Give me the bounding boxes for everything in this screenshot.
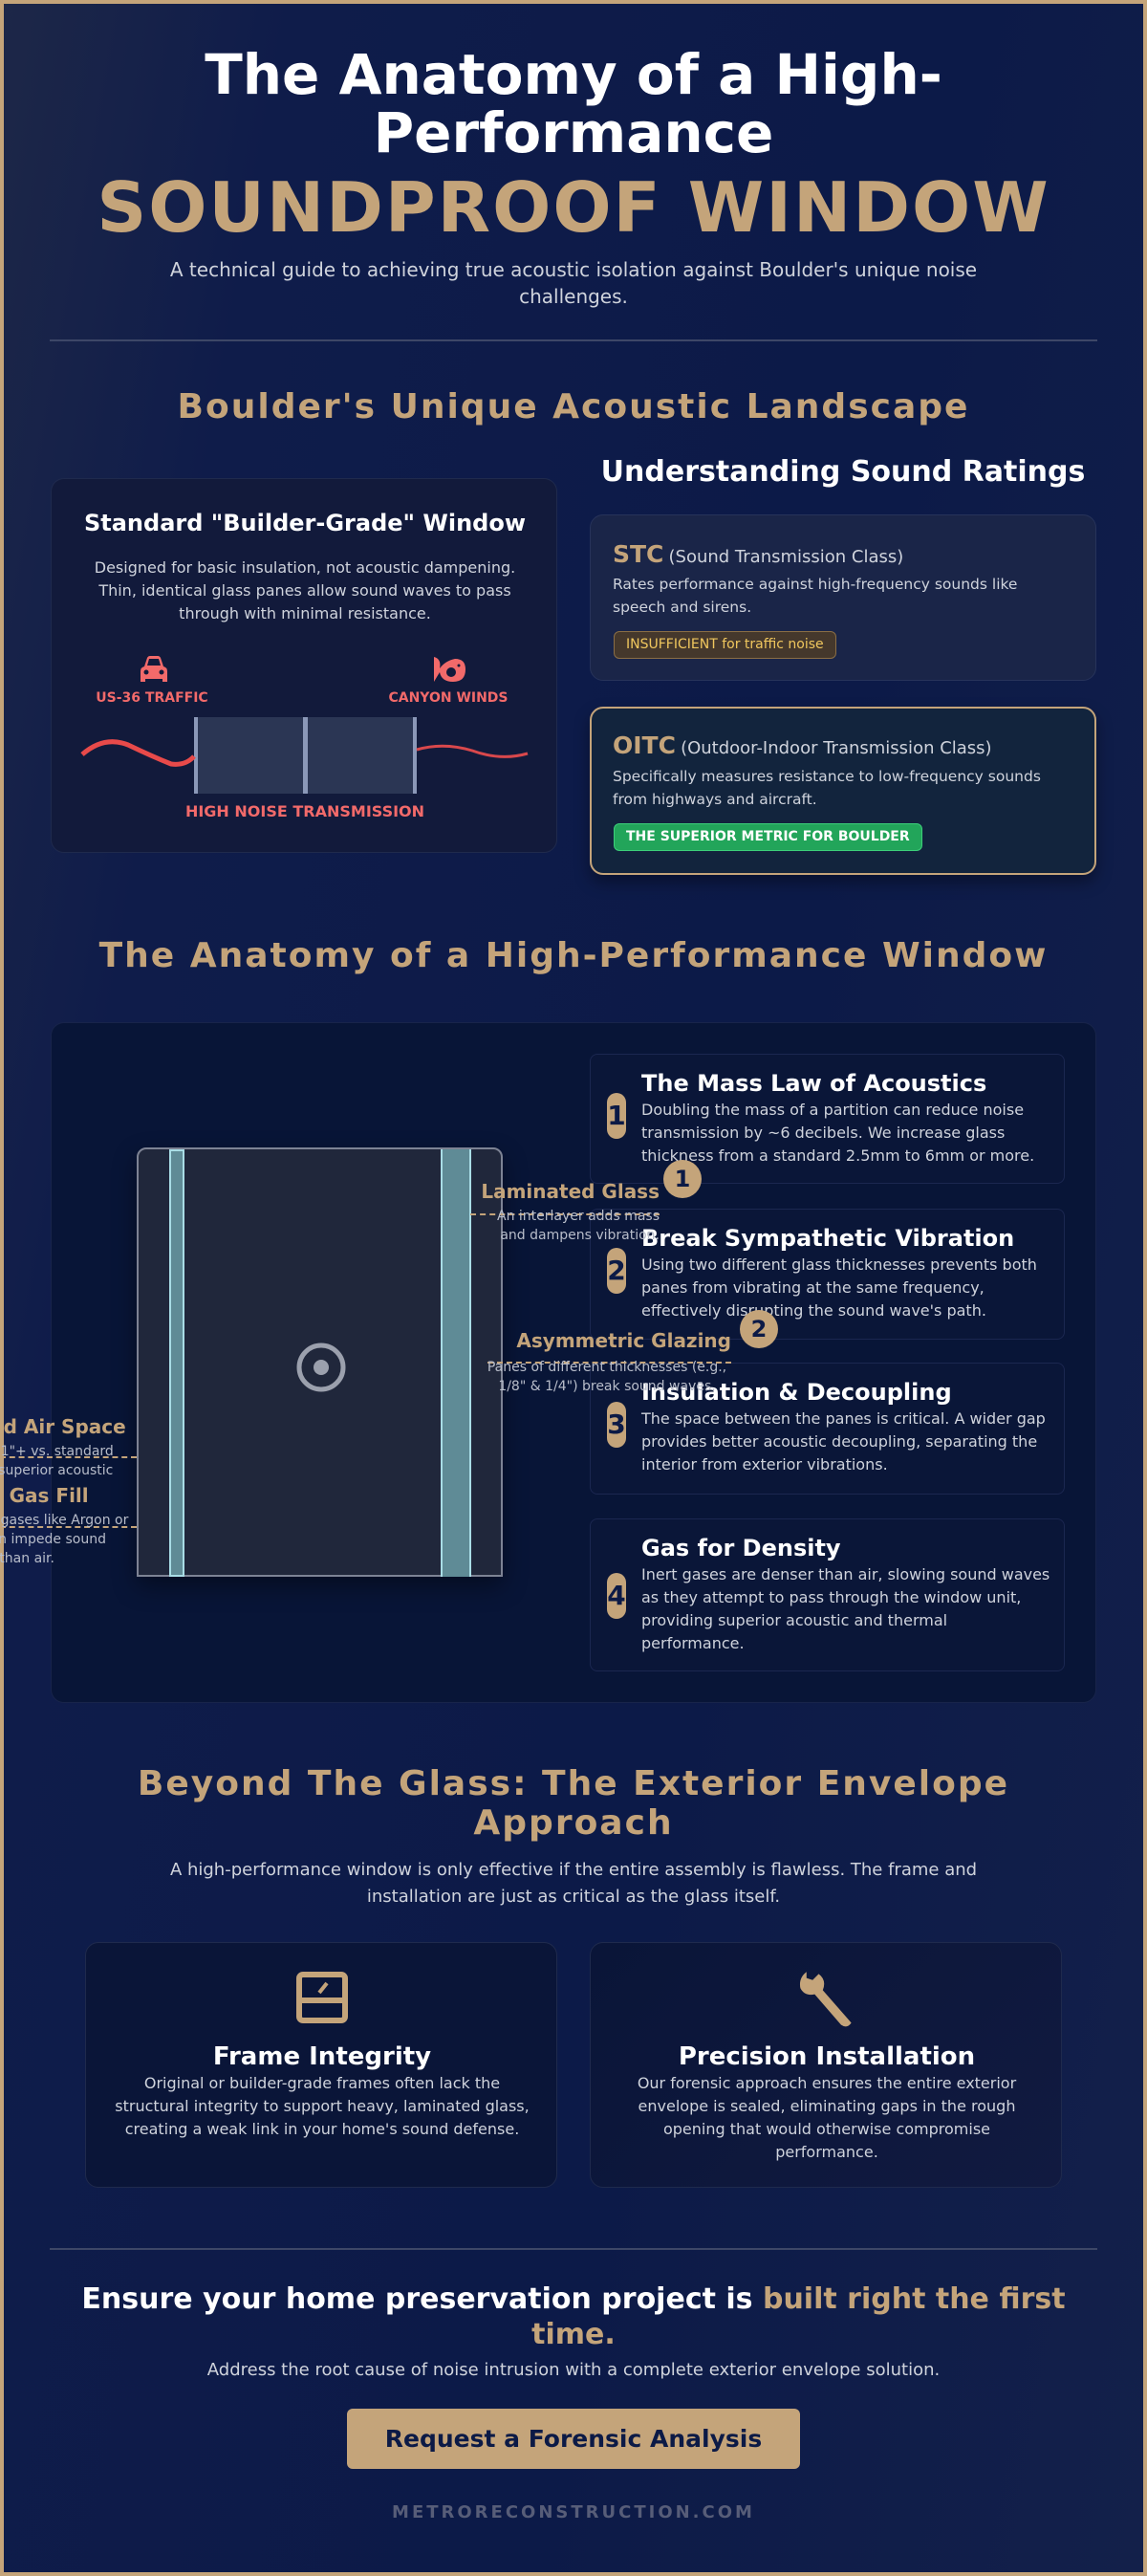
- diagram: thin window with waves: [80, 717, 528, 794]
- icon: car: [141, 656, 167, 682]
- feature card 4: 4: [607, 1580, 626, 1611]
- label: high noise: HIGH NOISE TRANSMISSION: [185, 802, 424, 820]
- feature card 4: Gas for Density: [641, 1535, 841, 1561]
- callout: air space: [0, 1415, 137, 1478]
- title: Frame Integrity: [213, 2042, 431, 2071]
- label: traffic: US-36 TRAFFIC: [96, 690, 208, 706]
- card description: Designed for basic insulation, not acoustic dampening. Thin, identical glass panes allow sound waves to pass through with minimal resistance.: [95, 558, 515, 622]
- badge: insufficient: [614, 631, 836, 659]
- heading: Boulder's landscape: Boulder's Unique Acoustic Landscape: [178, 387, 969, 426]
- badge 2: 2: [751, 1316, 767, 1343]
- feature card 1: The Mass Law of Acoustics: [641, 1070, 986, 1097]
- feature card 3: Insulation & Decoupling: [641, 1379, 952, 1406]
- badge: superior: THE SUPERIOR METRIC FOR BOULDER: [626, 829, 910, 844]
- feature card 4: Inert gases are denser than air, slowing sound waves as they attempt to pass through the window unit, providing superior acoustic and thermal performance.: [641, 1565, 1050, 1652]
- button: [347, 2409, 800, 2469]
- OITC description: Specifically measures resistance to low-frequency sounds from highways and aircraft.: [613, 768, 1041, 808]
- heading: beyond the glass: Beyond The Glass: The Exterior Envelope Approach: [138, 1764, 1009, 1843]
- feature card 1: 1: [607, 1100, 626, 1131]
- text: Original or builder-grade frames often lack the structural integrity to support heavy, laminated glass, creating a weak link in your home's sound defense.: [115, 2074, 530, 2138]
- badge: insufficient: INSUFFICIENT for traffic noise: [626, 637, 824, 652]
- panel: OITC: [590, 707, 1096, 875]
- panel: anatomy: [51, 1022, 1096, 1703]
- subtitle: A technical guide to achieving true acoustic isolation against Boulder's unique noise challenges.: [170, 258, 977, 308]
- callout: laminated glass: An interlayer adds mass: [497, 1209, 660, 1224]
- callout: asymmetric glazing: [487, 1329, 731, 1394]
- glass pane thick: [441, 1149, 471, 1577]
- feature card 1: Doubling the mass of a partition can reduce noise transmission by ~6 decibels. We increase glass thickness from a standard 2.5mm to 6mm or more.: [641, 1101, 1034, 1165]
- feature card 2: Break Sympathetic Vibration: [641, 1225, 1014, 1252]
- card: precision installation: [590, 1942, 1062, 2188]
- feature card 3: [590, 1363, 1065, 1495]
- CTA heading: Ensure your home preservation project is built right the first time.: [81, 2282, 1066, 2351]
- CTA subtext: Address the root cause of noise intrusion with a complete exterior envelope solution.: [207, 2360, 940, 2380]
- diagram: window cross-section: [137, 1147, 503, 1577]
- callout: laminated glass: and dampens vibration.: [500, 1228, 660, 1243]
- feature card 2: [590, 1209, 1065, 1340]
- STC heading: STC (Sound Transmission Class): [613, 540, 903, 568]
- intro paragraph: A high-performance window is only effective if the entire assembly is flawless. The frame and installation are just as critical as the glass itself.: [170, 1860, 977, 1907]
- title: [205, 42, 942, 165]
- icon: frame: [296, 1972, 348, 2023]
- badge 2: [740, 1310, 778, 1348]
- badge: superior: [614, 823, 922, 851]
- label: winds: CANYON WINDS: [388, 690, 509, 706]
- card: frame integrity: [85, 1942, 557, 2188]
- feature card 1: [590, 1054, 1065, 1184]
- heading: sound ratings: Understanding Sound Ratings: [601, 455, 1085, 489]
- title: The Anatomy of a High-: [205, 42, 942, 107]
- OITC heading: OITC (Outdoor-Indoor Transmission Class): [613, 731, 992, 759]
- callout: asymmetric glazing: Panes of different thicknesses (e.g.,: [487, 1360, 726, 1375]
- feature card 2: 2: [607, 1255, 626, 1286]
- callout: asymmetric glazing: 1/8" & 1/4") break sound waves.: [498, 1379, 716, 1394]
- title: Precision Installation: [679, 2042, 975, 2071]
- button: Request a Forensic Analysis: [385, 2425, 762, 2453]
- icon: wrench: [799, 1972, 851, 2027]
- callout: gas fill: [0, 1484, 137, 1566]
- feature card 3: The space between the panes is critical. A wider gap provides better acoustic decoupling, separating the interior from exterior vibrations.: [641, 1409, 1046, 1474]
- badge 1: [663, 1160, 702, 1198]
- icon: wind: [434, 657, 465, 682]
- glass pane thin: [169, 1149, 184, 1577]
- callout: laminated glass: [470, 1180, 660, 1243]
- panel: STC: [590, 514, 1096, 681]
- callout: asymmetric glazing: Asymmetric Glazing: [516, 1329, 731, 1352]
- text: Our forensic approach ensures the entire exterior envelope is sealed, eliminating gaps in the rough opening that would otherwise compromise performance.: [638, 2074, 1016, 2161]
- badge 1: 1: [675, 1166, 690, 1192]
- icon: target: [296, 1343, 346, 1392]
- feature card 4: [590, 1518, 1065, 1671]
- title: Performance: [374, 100, 773, 165]
- callout: laminated glass: Laminated Glass: [481, 1180, 660, 1203]
- footer: METRORECONSTRUCTION.COM: [392, 2502, 755, 2522]
- title highlight: SOUNDPROOF WINDOW: [97, 167, 1050, 248]
- feature card 3: 3: [607, 1408, 626, 1440]
- panel: standard window: [51, 478, 557, 853]
- feature card 2: Using two different glass thicknesses prevents both panes from vibrating at the same frequency, effectively disrupting the sound wave's path.: [641, 1255, 1037, 1320]
- STC description: Rates performance against high-frequency sounds like speech and sirens.: [613, 576, 1017, 616]
- heading: anatomy: The Anatomy of a High-Performance Window: [99, 936, 1048, 975]
- card title: Standard "Builder-Grade" Window: [84, 510, 526, 536]
